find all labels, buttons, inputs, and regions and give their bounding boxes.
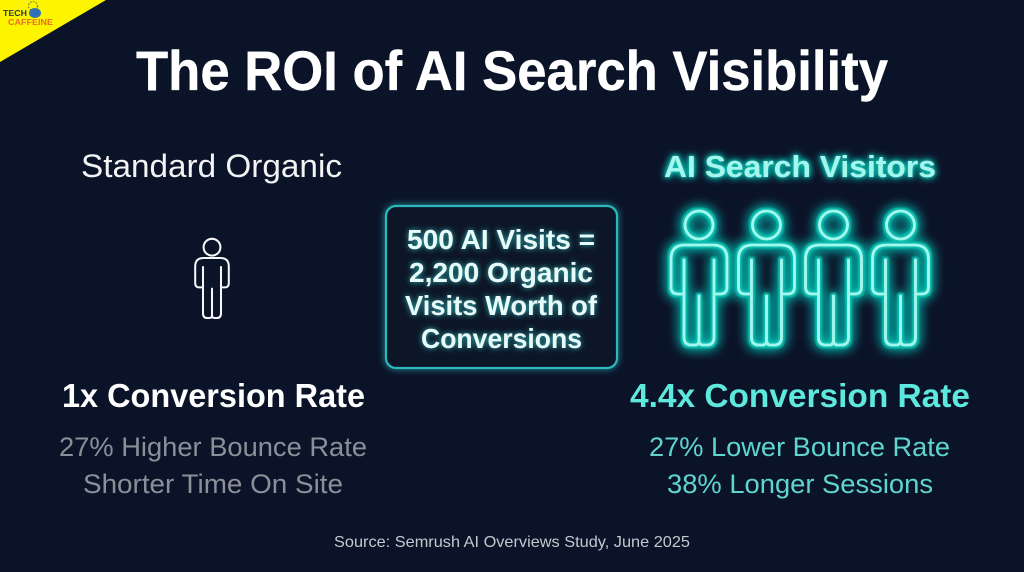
logo: Tech Caffeine corner badge: TECH: [3, 8, 27, 18]
callout: 500 AI visits: Conversions: [421, 323, 582, 354]
text: shorter time on site: Shorter Time On Site: [83, 469, 343, 499]
text: higher bounce rate: 27% Higher Bounce Rate: [59, 432, 367, 462]
icon: four glowing people: [671, 211, 928, 345]
heading: AI search visitors: AI Search Visitors: [664, 149, 936, 184]
logo: Tech Caffeine corner badge: [0, 0, 106, 62]
panel: standard organic: [59, 148, 367, 499]
panel: AI search visitors: [630, 149, 970, 499]
heading: standard organic: Standard Organic: [81, 148, 342, 184]
logo: Tech Caffeine corner badge: CAFFEINE: [8, 18, 54, 27]
title: The ROI of AI Search Visibility: [136, 39, 888, 102]
text: longer sessions: 38% Longer Sessions: [667, 469, 933, 499]
callout: 500 AI visits: [386, 206, 617, 368]
source note: Source: Semrush AI Overviews Study, June 2025: [334, 534, 690, 551]
stat: 4.4x conversion rate: 4.4x Conversion Rate: [630, 377, 970, 414]
icon: single person: [195, 239, 229, 318]
callout: 500 AI visits: 2,200 Organic: [409, 257, 593, 288]
callout: 500 AI visits: 500 AI Visits =: [407, 224, 595, 255]
stat: 1x conversion rate: 1x Conversion Rate: [62, 377, 365, 414]
text: lower bounce rate: 27% Lower Bounce Rate: [649, 432, 950, 462]
callout: 500 AI visits: Visits Worth of: [405, 290, 598, 321]
